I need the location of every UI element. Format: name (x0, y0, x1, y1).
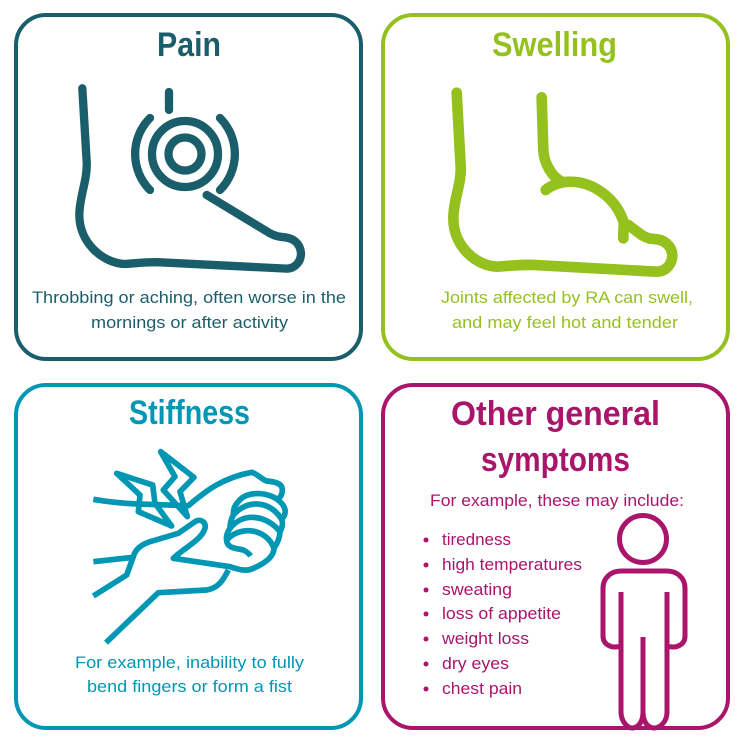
heading: Other general symptoms: Other general (451, 395, 660, 433)
text: swelling description: Joints affected by RA can swell, (441, 288, 693, 307)
panel border: pain (16, 15, 361, 359)
list: symptoms: tiredness (442, 530, 511, 549)
icon: swollen foot (453, 93, 672, 272)
text: pain description: Throbbing or aching, often worse in the (32, 288, 346, 307)
list: symptoms: dry eyes (442, 654, 509, 673)
icon: foot with pain target (79, 88, 301, 269)
text: intro line: For example, these may include: (430, 491, 684, 510)
icon: hand gripping fist with lightning bolts (93, 452, 285, 643)
list: symptoms: loss of appetite (442, 604, 561, 623)
text: pain description: mornings or after activity (91, 313, 289, 332)
panel: pain (16, 15, 361, 359)
list: symptoms: sweating (442, 580, 512, 599)
heading: Other general symptoms (451, 395, 660, 479)
panel border: other general symptoms (383, 385, 728, 728)
list: symptoms (424, 530, 582, 698)
panel: swelling (383, 15, 728, 359)
icon: person (603, 516, 685, 728)
text: stiffness description (75, 653, 305, 696)
panel: other general symptoms (383, 385, 728, 728)
text: swelling description: and may feel hot and tender (452, 313, 678, 332)
panel: stiffness (16, 385, 361, 728)
list: symptoms: high temperatures (442, 555, 582, 574)
text: swelling description (441, 288, 693, 332)
list: symptoms: weight loss (441, 629, 529, 648)
text: stiffness description: For example, inability to fully (75, 653, 305, 672)
heading: Pain: Pain (157, 26, 221, 64)
list: symptoms: chest pain (442, 679, 522, 698)
text: stiffness description: bend fingers or form a fist (87, 677, 292, 696)
panel border: swelling (383, 15, 728, 359)
heading: Stiffness: Stiffness (129, 394, 250, 432)
text: pain description (32, 288, 346, 332)
panel border: stiffness (16, 385, 361, 728)
heading: Swelling: Swelling (492, 26, 617, 64)
heading: Other general symptoms: symptoms (481, 441, 630, 479)
